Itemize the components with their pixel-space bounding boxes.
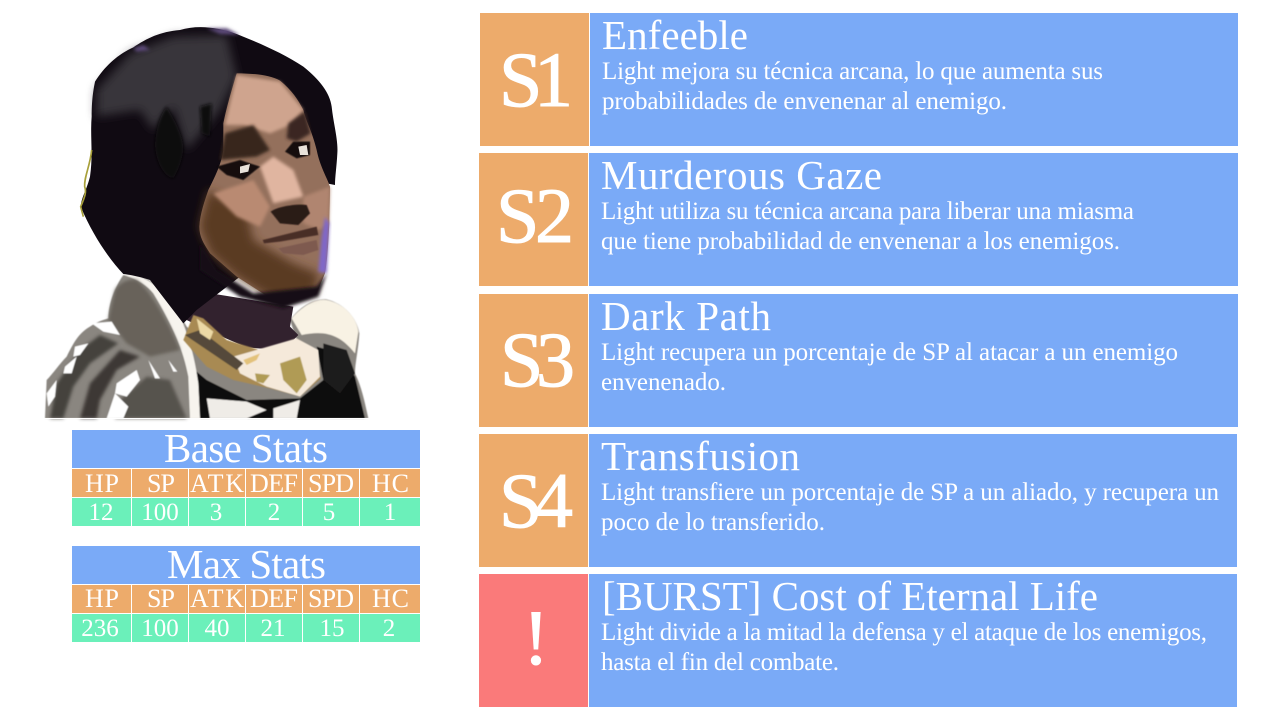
description: Cost of Eternal Life: [BURST] Cost of Eternal Life [602, 573, 1098, 619]
description: Dark Path: envenenado. [601, 369, 726, 396]
stat value row: 236 [81, 615, 119, 642]
panel: burst skill [479, 573, 1237, 707]
stat value row: 3 [210, 499, 222, 526]
panel: skill S3 [479, 293, 1238, 427]
description: Enfeeble [590, 12, 1238, 146]
badge: S1: S1 [499, 36, 573, 123]
stat value row: 40 [204, 615, 230, 642]
heading: base stats [72, 425, 420, 471]
stat value row: 2 [268, 499, 280, 526]
description: Cost of Eternal Life: Light divide a la mitad la defensa y el ataque de los enemigos, [601, 619, 1207, 646]
description: Enfeeble: Enfeeble [602, 12, 748, 58]
nose and mouth [271, 205, 310, 225]
stat header row: ATK [190, 584, 244, 613]
description: Murderous Gaze: que tiene probabilidad de envenenar a los enemigos. [601, 228, 1120, 255]
face [199, 73, 330, 308]
badge: exclamation [479, 574, 588, 707]
description: Transfusion [589, 433, 1237, 567]
stat header row: ATK [190, 469, 244, 498]
badge: S3: S3 [500, 316, 575, 403]
badge: S4 [479, 434, 588, 567]
neck [187, 290, 298, 351]
description: Cost of Eternal Life: hasta el fin del combate. [601, 649, 839, 676]
panel: skill S4 [479, 433, 1237, 567]
badge: S3 [479, 294, 588, 427]
stat value row: 21 [260, 615, 286, 642]
stat value row: 100 [141, 499, 179, 526]
stat header row: HC [372, 584, 409, 613]
stat header row: SP [147, 469, 175, 498]
stat header row [72, 584, 420, 613]
description: Murderous Gaze: Murderous Gaze [601, 152, 882, 198]
description: Transfusion: poco de lo transferido. [601, 509, 825, 536]
panel: max stats [72, 541, 420, 642]
stat header row: HP [85, 584, 119, 613]
stat header row: SPD [308, 469, 354, 498]
stat header row: HP [85, 469, 119, 498]
stat header row: SPD [308, 584, 354, 613]
armor [45, 275, 368, 418]
stat value row: 1 [384, 499, 396, 526]
base line [44, 417, 369, 420]
panel: base stats [72, 425, 420, 526]
stat value row [72, 498, 420, 526]
panel: skill S2 [479, 152, 1238, 286]
hair [81, 27, 337, 323]
eyes and brows [220, 125, 270, 160]
stat header row: DEF [250, 584, 298, 613]
description: Dark Path: Light recupera un porcentaje de SP al atacar a un enemigo [601, 339, 1178, 366]
stat value row: 5 [323, 499, 335, 526]
description: Cost of Eternal Life [589, 573, 1237, 707]
description: Dark Path [589, 293, 1238, 427]
description: Dark Path: Dark Path [601, 293, 771, 339]
description: Transfusion: Light transfiere un porcentaje de SP a un aliado, y recupera un [601, 479, 1220, 506]
stat header row: SP [147, 584, 175, 613]
stat value row: 100 [141, 615, 179, 642]
heading: base stats: Base Stats [164, 425, 328, 471]
description: Murderous Gaze: Light utiliza su técnica arcana para liberar una miasma [601, 198, 1134, 225]
stat value row: 15 [320, 615, 344, 642]
stat header row: DEF [250, 469, 298, 498]
stat header row: HC [372, 469, 409, 498]
hair highlights [81, 28, 240, 217]
badge: S4: S4 [499, 457, 573, 544]
heading: max stats: Max Stats [167, 541, 326, 587]
stat value row: 2 [383, 615, 395, 642]
gold collar [183, 315, 321, 397]
badge: exclamation: ! [523, 594, 549, 681]
description: Enfeeble: probabilidades de envenenar al enemigo. [602, 88, 1007, 115]
panel: skill S1 [480, 12, 1238, 146]
badge: S2 [479, 153, 588, 286]
portrait of Light [44, 27, 369, 419]
badge: S2: S2 [496, 172, 574, 259]
stat value row: 12 [88, 499, 114, 526]
description: Murderous Gaze [589, 152, 1238, 286]
badge: S1 [480, 13, 589, 146]
heading: max stats [72, 541, 420, 587]
stat header row [72, 469, 420, 498]
description: Enfeeble: Light mejora su técnica arcana, lo que aumenta sus [602, 58, 1103, 85]
stat value row [72, 614, 420, 642]
description: Transfusion: Transfusion [601, 433, 800, 479]
